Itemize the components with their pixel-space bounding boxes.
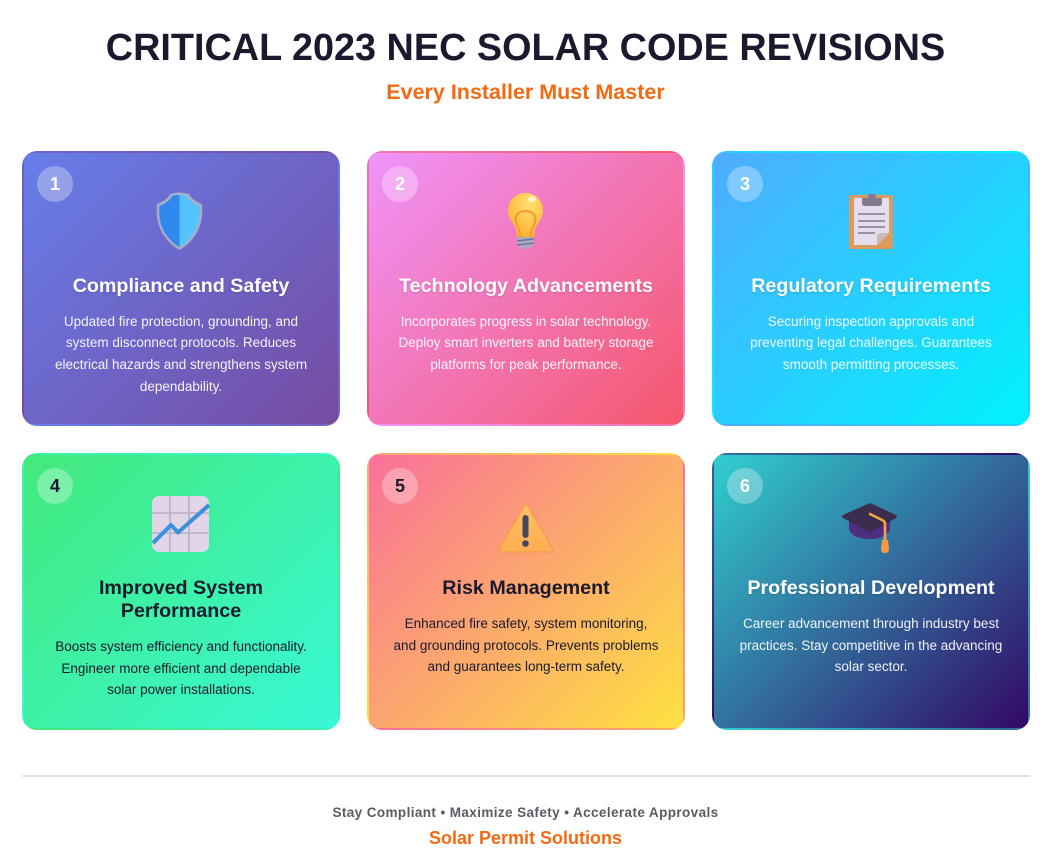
number badge 4 — [37, 468, 73, 504]
description: Boosts system efficiency and functionality. — [55, 639, 307, 654]
panel: professional development — [712, 453, 1030, 730]
heading: Regulatory Requirements — [751, 275, 991, 297]
icon: chart — [152, 496, 210, 552]
panel: risk management — [367, 453, 685, 730]
heading: Compliance and Safety — [73, 275, 289, 297]
icon: warning — [498, 502, 554, 553]
panel: technology advancements — [367, 151, 685, 426]
heading: Improved System Performance — [99, 577, 263, 622]
number badge 5 — [382, 468, 418, 504]
number badge 3: 3 — [740, 174, 750, 194]
number badge 2 — [382, 166, 418, 202]
number badge 2: 2 — [395, 174, 405, 194]
icon: light bulb — [508, 193, 543, 250]
number badge 5: 5 — [395, 476, 405, 496]
number badge 6: 6 — [740, 476, 750, 496]
description: Securing inspection approvals and — [768, 314, 974, 328]
description: and guarantees long-term safety. — [427, 659, 625, 674]
description: Incorporates progress in solar technology. — [401, 314, 651, 328]
description: Deploy smart inverters and battery storage — [398, 335, 654, 350]
title: CRITICAL 2023 NEC SOLAR CODE REVISIONS — [106, 27, 945, 69]
description: Career advancement through industry best — [743, 616, 999, 631]
subtitle: Every Installer Must Master — [386, 80, 665, 104]
description — [750, 314, 992, 372]
description: dependability. — [140, 379, 222, 394]
number badge 3 — [727, 166, 763, 202]
description: electrical hazards and strengthens system — [55, 357, 307, 372]
footer brand: Solar Permit Solutions — [429, 828, 622, 848]
description: Updated fire protection, grounding, and — [64, 314, 298, 328]
description: practices. Stay competitive in the advancing — [740, 638, 1002, 653]
description — [55, 314, 307, 394]
number badge 4: 4 — [50, 476, 60, 496]
description: solar sector. — [835, 659, 907, 674]
description: and grounding protocols. Prevents problems — [394, 638, 658, 653]
description: Engineer more efficient and dependable — [61, 661, 301, 676]
panel: regulatory requirements — [712, 151, 1030, 426]
icon: clipboard — [849, 194, 893, 249]
number badge 1: 1 — [50, 174, 60, 194]
heading: Technology Advancements — [399, 275, 653, 297]
description: platforms for peak performance. — [430, 357, 622, 372]
heading: Professional Development — [747, 577, 995, 599]
panel: improved system performance — [22, 453, 340, 730]
description: solar power installations. — [107, 682, 255, 697]
number badge 1 — [37, 166, 73, 202]
icon: graduation cap — [842, 503, 897, 553]
description — [394, 616, 658, 674]
description — [740, 616, 1002, 674]
description — [398, 314, 654, 372]
heading: Risk Management — [442, 577, 610, 599]
description: Enhanced fire safety, system monitoring, — [405, 616, 647, 631]
icon: shield — [156, 192, 202, 250]
description: system disconnect protocols. Reduces — [66, 335, 296, 350]
description: preventing legal challenges. Guarantees — [750, 335, 992, 350]
footer tagline: Stay Compliant • Maximize Safety • Accelerate Approvals — [332, 805, 719, 820]
description: smooth permitting processes. — [783, 357, 959, 372]
number badge 6 — [727, 468, 763, 504]
description — [55, 639, 307, 697]
panel: compliance and safety — [22, 151, 340, 426]
